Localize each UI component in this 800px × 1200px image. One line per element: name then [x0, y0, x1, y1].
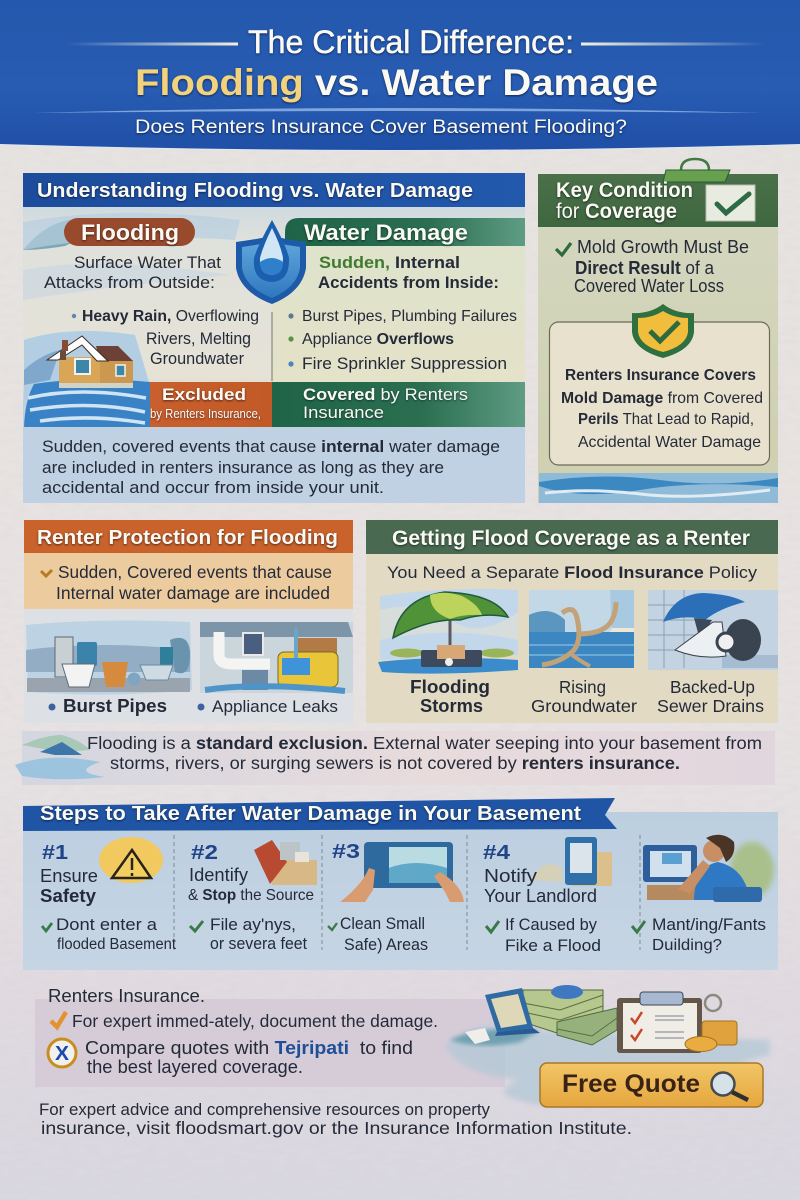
step 4: #4: [483, 842, 511, 864]
covered label: Insurance: [303, 403, 384, 422]
panel heading: Understanding Flooding vs. Water Damage: [37, 180, 473, 202]
peach note: Sudden, Covered events that cause: [58, 562, 332, 582]
step 5: Duilding?: [652, 937, 722, 954]
ribbon heading: [23, 798, 617, 831]
illustration: umbrella over flooded home: [378, 589, 518, 674]
flooding pill: Flooding: [81, 220, 179, 245]
rising groundwater label: Groundwater: [531, 696, 637, 716]
left intro text: Surface Water That: [74, 253, 221, 272]
icon: box of supplies: [254, 840, 317, 885]
right intro text: Sudden, Internal: [319, 254, 460, 272]
icon: flooded house: [24, 331, 150, 427]
flooding causes list: Heavy Rain, Overflowing: [82, 308, 259, 325]
panel: key condition for coverage: [538, 159, 778, 503]
step 4: If Caused by: [505, 915, 597, 934]
heading: Renters Insurance.: [48, 986, 205, 1006]
step 2: [188, 840, 317, 953]
exclusion text: storms, rivers, or surging sewers is not covered by renters insurance.: [110, 753, 680, 773]
step 2: or severa feet: [210, 934, 307, 953]
explanatory paragraph: [42, 437, 500, 497]
icon: magnifying glass: [712, 1072, 748, 1100]
mold condition text: Covered Water Loss: [574, 276, 724, 296]
icon: mountain and water: [15, 735, 105, 779]
flooding causes list: Rivers, Melting: [146, 330, 251, 348]
explanatory paragraph: accidental and occur from inside your unit.: [42, 478, 384, 497]
step 4: Notify: [484, 866, 537, 886]
subtitle: Does Renters Insurance Cover Basement Flooding?: [135, 117, 627, 138]
step 4: [483, 837, 612, 955]
icon: hands holding tablet: [340, 842, 464, 902]
step 3: Safe) Areas: [344, 935, 428, 954]
icon: gold shield check: [632, 304, 694, 358]
compare quotes text: the best layered coverage.: [87, 1056, 303, 1077]
panel: renters insurance quote: [35, 985, 770, 1107]
coverage note box: Renters Insurance Covers: [565, 367, 756, 384]
flooding pill: [64, 218, 195, 246]
sewer drains label: [657, 677, 764, 716]
water damage pill: Water Damage: [304, 220, 468, 245]
panel heading: Renter Protection for Flooding: [37, 526, 338, 549]
step 2: & Stop the Source: [188, 887, 314, 904]
mold condition text: Mold Growth Must Be: [577, 237, 749, 257]
footer resources text: insurance, visit floodsmart.gov or the Insurance Information Institute.: [41, 1118, 632, 1138]
flooding causes list: [72, 308, 259, 368]
flooding causes list: Groundwater: [150, 350, 244, 368]
step 2: File ay'nys,: [210, 915, 296, 934]
panel: steps after water damage: [23, 798, 778, 970]
step 1: flooded Basement: [57, 936, 177, 953]
flooding storms label: Flooding: [410, 677, 490, 697]
icon: man at computer on phone: [643, 835, 774, 902]
panel heading: Key Condition: [556, 179, 693, 202]
step 5: [632, 835, 774, 954]
step 1: Safety: [40, 886, 96, 906]
mold condition text: [556, 237, 749, 296]
callout: standard exclusion: [15, 731, 775, 785]
panel: getting flood coverage as a renter: [366, 520, 778, 723]
burst pipes label: Burst Pipes: [63, 696, 167, 716]
step 1: [40, 837, 177, 953]
icon: warning sign: [99, 837, 163, 883]
explanatory paragraph: are included in renters insurance as long as they are: [42, 458, 444, 477]
step 3: [328, 841, 464, 954]
illustration: rising groundwater: [529, 590, 634, 668]
free quote button: Free Quote: [562, 1070, 700, 1098]
panel heading: [556, 179, 693, 223]
document instruction: For expert immed-ately, document the damage.: [72, 1011, 438, 1031]
left intro text: Attacks from Outside:: [44, 273, 215, 292]
icon: phone and documents: [530, 837, 612, 886]
ribbon heading: Steps to Take After Water Damage in Your Basement: [40, 802, 581, 825]
excluded label: Excluded: [162, 385, 246, 404]
right intro text: [318, 254, 499, 292]
exclusion text: Flooding is a standard exclusion. External water seeping into your basement from: [87, 733, 762, 753]
step 1: Dont enter a: [56, 915, 158, 934]
title line two: Flooding vs. Water Damage: [135, 62, 658, 103]
exclusion text: [87, 733, 762, 773]
icon: water drop shield: [236, 220, 306, 304]
panel: understanding flooding vs water damage: [23, 173, 525, 503]
header decorative rules: [66, 42, 765, 46]
illustration: backed-up sewer drain: [648, 590, 778, 670]
covered label: Covered by Renters: [303, 385, 468, 404]
step 3: Clean Small: [340, 914, 425, 933]
covered label: [272, 382, 525, 427]
coverage note box: Mold Damage from Covered: [561, 390, 763, 407]
appliance leaks label: Appliance Leaks: [212, 697, 338, 716]
sewer drains label: Backed-Up: [670, 677, 755, 697]
compare quotes text: [48, 1037, 413, 1077]
panel heading: Getting Flood Coverage as a Renter: [392, 527, 750, 550]
step 3: #3: [332, 841, 360, 863]
mold condition text: Direct Result of a: [575, 258, 715, 278]
step 5: Mant/ing/Fants: [652, 915, 766, 934]
step 4: Your Landlord: [484, 886, 597, 906]
right intro text: Accidents from Inside:: [318, 274, 499, 292]
compare quotes text: Compare quotes with Tejripati to find: [85, 1037, 413, 1058]
compare quotes text: X: [55, 1043, 70, 1065]
rising groundwater label: Rising: [559, 677, 606, 697]
water damage causes list: Fire Sprinkler Suppression: [302, 355, 507, 373]
header banner: [0, 0, 800, 150]
water damage causes list: Burst Pipes, Plumbing Failures: [302, 308, 517, 325]
sewer drains label: Sewer Drains: [657, 696, 764, 716]
footer resources text: For expert advice and comprehensive resources on property: [39, 1100, 490, 1119]
coverage note box: Perils That Lead to Rapid,: [578, 411, 754, 428]
excluded label: by Renters Insurance,: [150, 407, 261, 421]
water damage causes list: [288, 308, 517, 373]
water band: [539, 473, 778, 503]
panel: renter protection for flooding: [24, 520, 353, 723]
water damage pill: [285, 218, 525, 246]
left intro text: [44, 253, 221, 292]
step 2: #2: [191, 842, 218, 864]
step 4: Fike a Flood: [505, 936, 601, 955]
footer resources text: [39, 1100, 632, 1138]
peach note: Internal water damage are included: [56, 583, 330, 603]
title line one: The Critical Difference:: [248, 24, 574, 60]
peach note: [24, 553, 353, 609]
explanatory paragraph: Sudden, covered events that cause internal water damage: [42, 437, 500, 456]
illustration: burst pipes: [26, 621, 192, 695]
illustration: appliance leak: [200, 622, 353, 693]
water damage causes list: Appliance Overflows: [302, 331, 454, 348]
coverage note box: [550, 322, 770, 465]
step 2: Identify: [189, 865, 248, 885]
flooding storms label: Storms: [420, 696, 483, 716]
separate policy subheading: You Need a Separate Flood Insurance Policy: [387, 563, 758, 582]
step 1: Ensure: [40, 866, 98, 886]
step 1: #1: [42, 842, 68, 864]
icon: clipboard clip with check: [663, 159, 755, 221]
excluded label: [150, 382, 272, 427]
illustration: cash and tablet: [465, 985, 617, 1045]
panel heading: for Coverage: [556, 200, 677, 223]
flooding storms label: [410, 677, 490, 716]
free quote button: [540, 1063, 763, 1107]
coverage note box: Accidental Water Damage: [578, 434, 761, 451]
illustration: checklist clipboard and coins: [617, 992, 737, 1053]
rising groundwater label: [531, 677, 637, 716]
